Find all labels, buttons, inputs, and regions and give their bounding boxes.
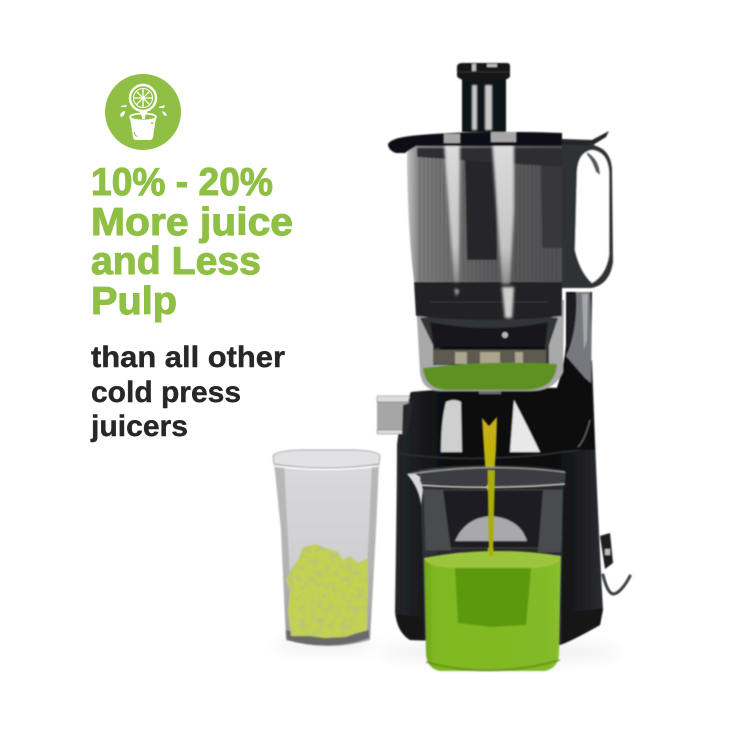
heading: more juice less pulp: Pulp [91,280,177,323]
juice stream over glass [488,470,495,556]
jug lid [388,132,562,153]
base highlights [441,400,462,452]
side switch [600,533,613,569]
subheading: comparison text: juicers [90,410,188,443]
juice bowl lower section [416,300,564,391]
glass beaker with juice [407,465,566,673]
icon: juicing citrus badge [105,74,181,150]
main jug [407,145,562,288]
cup body [274,462,379,646]
subheading: comparison text: cold press [91,376,241,409]
beaker rim [420,466,566,485]
pulp [286,544,368,638]
plunger cap [457,63,510,81]
plunger shaft [462,78,506,132]
pulp cup [273,450,380,646]
beaker side walls over dark body [424,490,563,552]
floor shadows [273,641,620,661]
subheading: comparison text [90,341,286,443]
juicer machine [377,63,630,645]
beaker glass [407,465,566,673]
cup base [286,630,369,646]
glossy base streak [578,420,590,447]
pulp outlet [377,396,410,434]
spout [471,380,511,452]
dark reflection in glass [442,490,543,548]
power cord [603,575,630,594]
cup rim [273,450,380,468]
heading: more juice less pulp: More juice [91,201,293,244]
heading: more juice less pulp: 10% - 20% [91,161,273,204]
heading: more juice less pulp: and Less [91,240,261,283]
jug inner dark panels [465,158,497,260]
jug lower ring [414,282,562,320]
subheading: comparison text: than all other [91,341,286,374]
handle [562,143,613,288]
jug ribs [420,158,556,280]
juice stream [482,417,497,556]
juice fill [424,551,561,671]
glossy arm column [530,292,595,450]
motor base [395,360,603,645]
jug highlights [444,142,514,318]
heading: more juice less pulp [91,161,293,323]
